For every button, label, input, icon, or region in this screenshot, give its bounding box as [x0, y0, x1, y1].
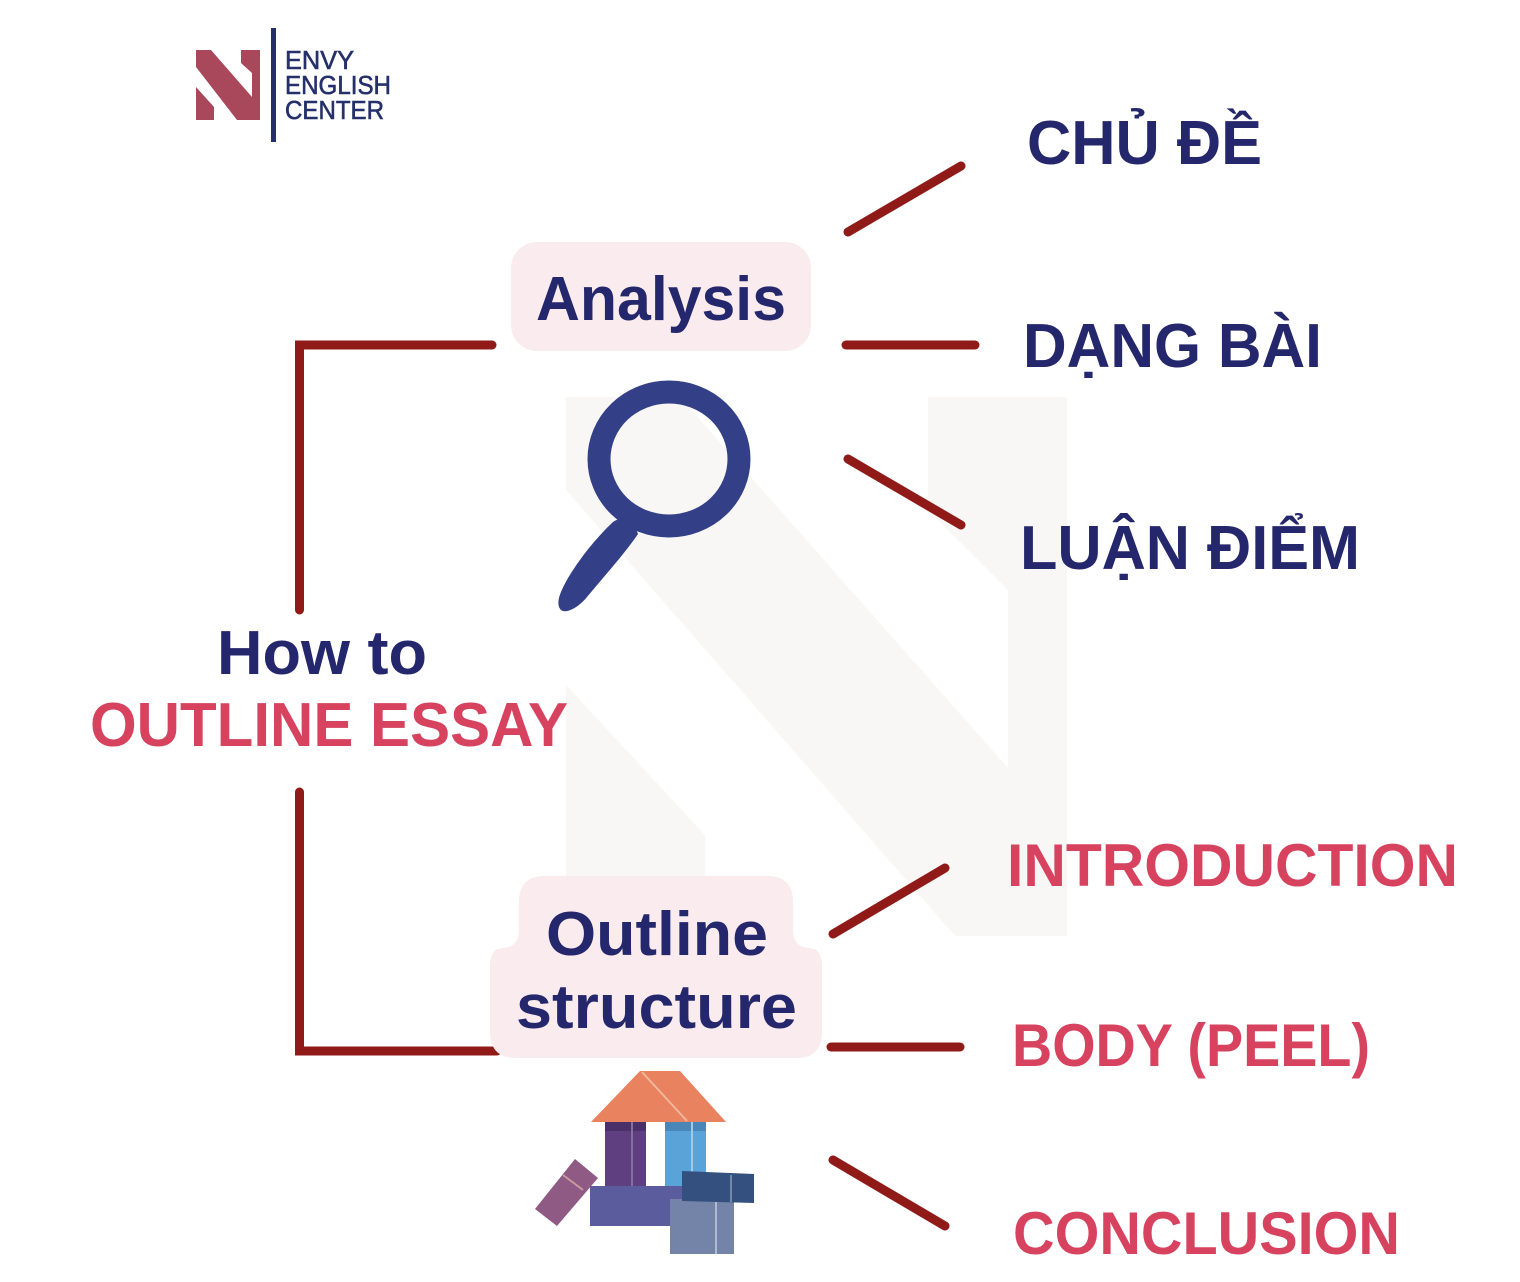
pill: outline structure: Outline [546, 900, 768, 969]
grey block [670, 1199, 734, 1254]
logo text: ENVY [285, 45, 354, 75]
connector: analysis to chủ đề [848, 166, 961, 232]
base block [590, 1186, 690, 1226]
logo divider [271, 28, 276, 142]
connector: outline to body [831, 1042, 960, 1052]
label: dạng bài: DẠNG BÀI [1023, 312, 1322, 381]
icon: toy blocks house [535, 1071, 754, 1254]
connector: analysis to luận điểm [848, 459, 961, 525]
navy block [682, 1171, 754, 1203]
roof [591, 1071, 726, 1122]
watermark N [566, 397, 1067, 936]
logo text [285, 45, 391, 125]
central title [90, 619, 568, 760]
connector: outline to introduction [833, 868, 945, 934]
label: luận điểm: LUẬN ĐIỂM [1020, 514, 1360, 583]
connector: how to to outline structure [300, 792, 497, 1051]
tilted block [535, 1159, 598, 1226]
pill: analysis: Analysis [536, 265, 786, 334]
pill: outline structure [490, 876, 822, 1058]
central title: OUTLINE ESSAY [90, 691, 568, 760]
connector: outline to conclusion [833, 1160, 945, 1226]
central title: How to [217, 619, 427, 688]
label: chủ đề: CHỦ ĐỀ [1027, 109, 1262, 178]
label: introduction: INTRODUCTION [1007, 832, 1458, 899]
purple block [605, 1122, 646, 1188]
connector: how to to analysis [300, 345, 492, 610]
connector: analysis to dạng bài [846, 340, 975, 350]
icon: magnifying glass [558, 392, 739, 611]
pill: analysis [511, 242, 811, 351]
logo mark [196, 50, 260, 120]
blue block [665, 1122, 706, 1188]
logo text: CENTER [285, 95, 384, 125]
label: conclusion: CONCLUSION [1013, 1200, 1400, 1267]
label: body: BODY (PEEL) [1012, 1012, 1370, 1079]
pill: outline structure: structure [516, 973, 797, 1042]
logo text: ENGLISH [285, 70, 391, 100]
logo [196, 28, 391, 142]
